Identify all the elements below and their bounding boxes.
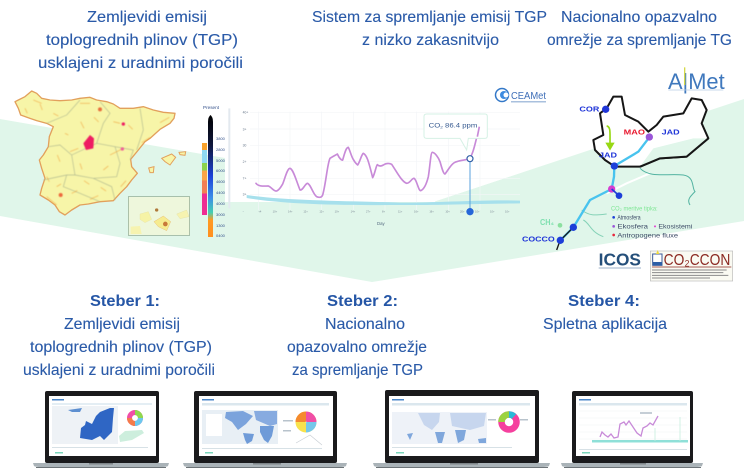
x axis labels: 11+ <box>398 210 403 214</box>
station labels: JAD <box>599 151 617 160</box>
heading: low latency monitoring system: Sistem za spremljanje emisij TGP <box>312 9 547 26</box>
heading: emission maps: usklajeni z uradnimi poročili <box>38 55 243 72</box>
x axis labels: 10+ <box>273 210 278 214</box>
x axis labels: 16+ <box>414 210 419 214</box>
COCCON logo: CO₂CCON <box>664 252 730 269</box>
colour scale legend: 5000 <box>216 158 226 163</box>
Balearic islands <box>149 152 186 173</box>
x axis labels: 10+ <box>505 210 510 214</box>
station labels: COCCO <box>522 234 555 243</box>
network legend: Atmosfera <box>617 216 641 222</box>
x axis labels: 10+ <box>475 210 480 214</box>
CEAMet logo <box>496 88 546 102</box>
colour scale legend: 3800 <box>216 136 226 141</box>
x axis labels: +4 <box>258 210 262 214</box>
heading: national observation network: Nacionalno opazvalno <box>561 9 717 26</box>
x axis labels: 12+ <box>303 210 308 214</box>
pillar 4 text <box>543 293 667 333</box>
x axis labels: 10+ <box>445 210 450 214</box>
CEAMet logo: CEAMet <box>511 90 546 102</box>
colour scale legend: 4600 <box>216 179 226 184</box>
pillar 1 text: toplogrednih plinov (TGP) <box>30 339 212 356</box>
heading: emission maps: Zemljevidi emisij <box>87 9 207 26</box>
pillar 1 text <box>23 293 215 379</box>
main river <box>560 137 649 241</box>
national network map <box>522 67 733 281</box>
pillar 2 text: za spremljanje TGP <box>292 362 423 379</box>
x axis labels <box>258 210 510 226</box>
laptop 4: time series <box>561 391 703 468</box>
network legend <box>611 206 692 239</box>
heading: national observation network: omrežje za spremljanje TG <box>547 32 732 49</box>
network legend: Ekosfera <box>617 225 649 231</box>
COCCON logo <box>650 250 733 281</box>
emissions line <box>256 127 479 197</box>
heading: low latency monitoring system <box>312 9 547 49</box>
emissions map of Spain <box>15 91 190 235</box>
chart grid <box>229 108 520 210</box>
x axis labels: 14+ <box>351 210 356 214</box>
x axis labels: 10+ <box>335 210 340 214</box>
pillar 4 text: Spletna aplikacija <box>543 316 667 333</box>
x axis labels: 12+ <box>319 210 324 214</box>
background green band <box>0 99 744 282</box>
station labels: JAD <box>662 128 680 137</box>
pillar 1 text: usklajeni z uradnimi poročili <box>23 362 215 379</box>
pie chart <box>130 412 140 424</box>
colour scale legend: Present <box>203 105 220 110</box>
station labels <box>522 105 680 243</box>
y axis labels: 2+ <box>243 160 247 164</box>
network legend: Antropogene fluxe <box>617 233 679 239</box>
donut chart <box>502 414 516 430</box>
river tributaries <box>640 168 695 205</box>
colour scale legend: 1300 <box>216 223 226 228</box>
inset map <box>128 197 190 235</box>
pillar 1 text: Zemljevidi emisij <box>64 316 180 333</box>
pillar 4 text: Steber 4: <box>568 293 640 310</box>
colour scale legend: 2800 <box>216 147 226 152</box>
colour scale legend: 4400 <box>216 190 226 195</box>
CO2 line chart <box>229 108 520 226</box>
chart panel background <box>225 105 523 202</box>
colour scale legend: 0400 <box>216 233 226 238</box>
x axis labels: 27+ <box>366 210 371 214</box>
network legend: CO₂ meritve tipka: <box>611 206 658 213</box>
x axis labels: 8+ <box>382 210 385 214</box>
heading: national observation network <box>547 9 732 49</box>
highlight marker <box>466 156 474 215</box>
heading: low latency monitoring system: z nizko zakasnitvijo <box>362 32 499 49</box>
x axis labels: 16+ <box>429 210 434 214</box>
colour scale legend: 3000 <box>216 212 226 217</box>
x axis labels: Day <box>377 221 386 226</box>
CO2 callout: 2 <box>440 125 444 130</box>
y axis labels: 40+ <box>243 110 248 114</box>
station labels: CH₄ <box>540 218 554 227</box>
CO2 callout: 86.4 ppm <box>443 122 478 129</box>
heading: emission maps: toplogrednih plinov (TGP) <box>46 32 238 49</box>
laptop 1: Europe map <box>33 391 169 468</box>
y axis labels: 3+ <box>243 193 247 197</box>
y axis labels: 30 <box>243 144 247 148</box>
colour scale legend: 4000 <box>216 201 226 206</box>
y axis labels: - <box>243 209 244 213</box>
stations <box>557 106 653 244</box>
y axis labels: 3+ <box>243 127 247 131</box>
pie chart <box>300 416 312 428</box>
pillar 2 text: Steber 2: <box>327 293 398 310</box>
x axis labels: 20+ <box>460 210 465 214</box>
AIMet logo: A|Met <box>668 69 725 94</box>
white catchment <box>593 97 708 167</box>
station labels: MAO <box>624 128 645 137</box>
white river channel <box>607 173 650 193</box>
heading: emission maps <box>38 9 243 72</box>
pillar 1 text: Steber 1: <box>90 293 160 310</box>
colour scale legend: 6000 <box>216 168 226 173</box>
ICOS logo: ICOS <box>599 249 641 269</box>
y axis labels: 7+ <box>243 176 247 180</box>
colour scale legend <box>202 105 226 238</box>
laptop 2: world map <box>183 391 347 468</box>
network legend: Ekosistemi <box>658 225 692 231</box>
pillar 2 text <box>287 293 427 379</box>
pillar 2 text: opazovalno omrežje <box>287 339 427 356</box>
x axis labels: 14+ <box>288 210 293 214</box>
x axis labels: 10+ <box>490 210 495 214</box>
light blue baseline ribbon <box>247 195 520 205</box>
green flow arrow <box>605 126 615 151</box>
CO2 callout: CO <box>429 122 439 129</box>
laptop 3: world map with donut <box>373 390 550 468</box>
pillar 2 text: Nacionalno <box>325 316 405 333</box>
y axis labels <box>243 110 248 213</box>
station labels: COR <box>579 105 600 114</box>
CO2 callout <box>424 114 487 150</box>
